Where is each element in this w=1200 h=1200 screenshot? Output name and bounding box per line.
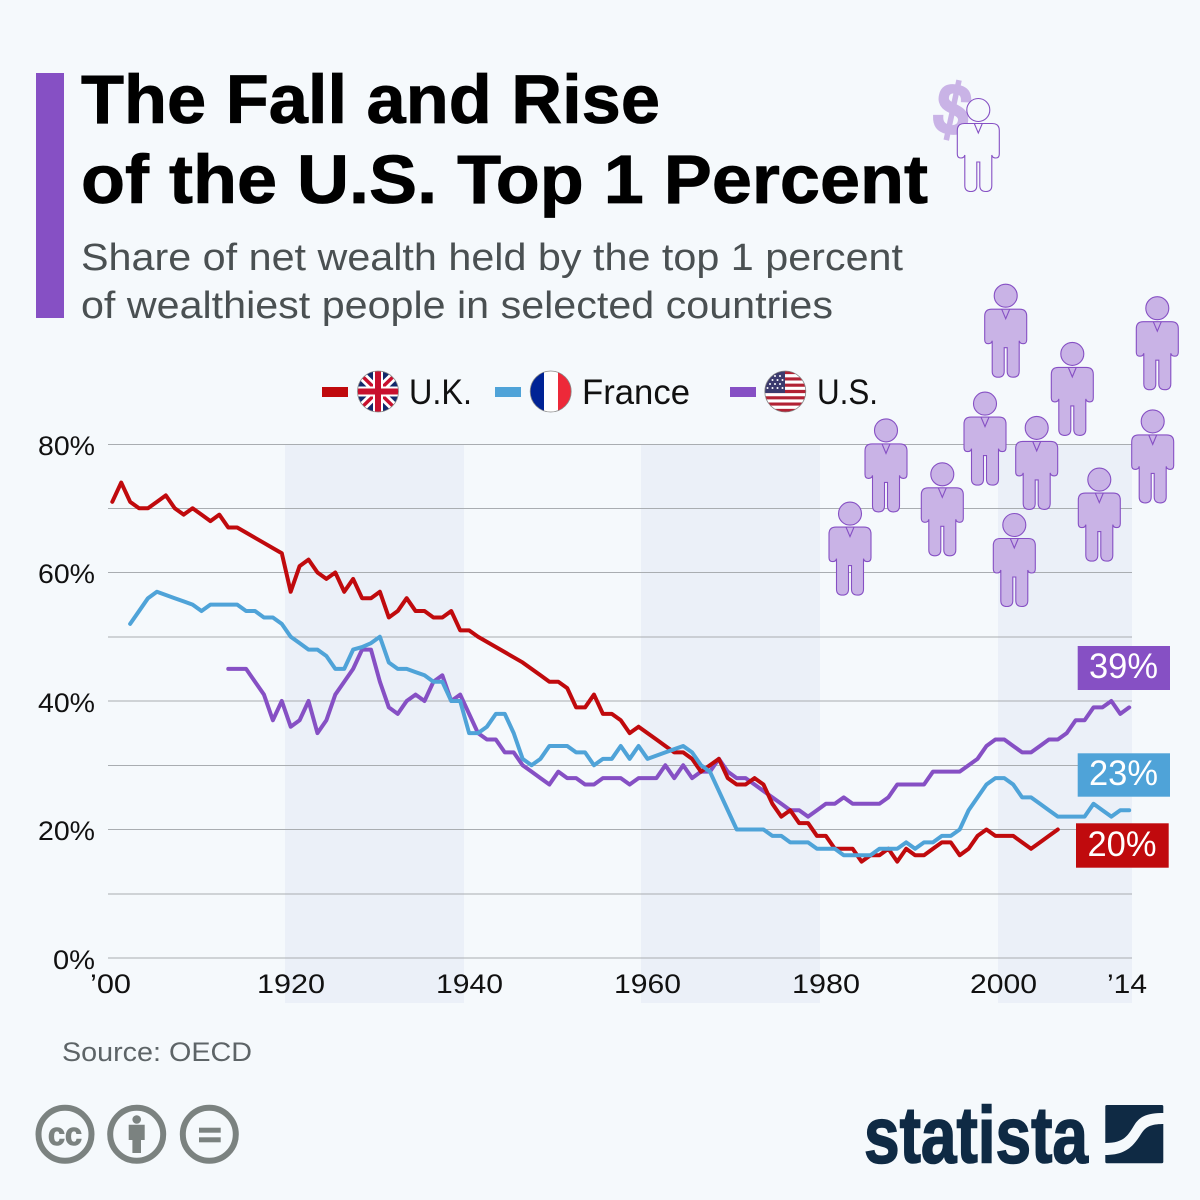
- y axis labels: 40%: [38, 688, 95, 718]
- legend: [322, 371, 878, 412]
- subtitle: of wealthiest people in selected countries: [81, 285, 833, 327]
- icon: U.K. flag: [357, 371, 399, 412]
- gridlines: [108, 444, 1132, 958]
- line chart: [112, 483, 1129, 862]
- person 11: [829, 502, 871, 595]
- y axis labels: 20%: [38, 816, 95, 846]
- icon: U.S. flag: [764, 371, 806, 412]
- statista logo mark: [1105, 1105, 1164, 1163]
- icon: dollar sign with person: $: [927, 67, 978, 153]
- subtitle: Share of net wealth held by the top 1 percent: [81, 237, 903, 279]
- person 10: [993, 514, 1035, 606]
- person 8: [921, 463, 963, 556]
- person 5: [1132, 410, 1174, 503]
- value label: France 23%: [1078, 753, 1170, 797]
- title: of the U.S. Top 1 Percent: [81, 141, 928, 218]
- x axis labels: 1980: [792, 969, 860, 999]
- statista wordmark: statista: [864, 1090, 1088, 1180]
- y axis labels: 80%: [38, 431, 95, 461]
- value label: France 23%: 23%: [1089, 754, 1158, 793]
- value label: U.S. 39%: [1078, 646, 1170, 690]
- legend swatch: U.S.: [730, 387, 756, 397]
- x axis labels: 1920: [257, 969, 325, 999]
- y axis labels: 0%: [53, 945, 95, 975]
- value label: U.K. 20%: 20%: [1088, 825, 1156, 864]
- y axis labels: [38, 431, 95, 975]
- person 1: [985, 284, 1027, 377]
- legend swatch: France: [495, 387, 521, 397]
- person 3: [1051, 342, 1093, 435]
- x axis labels: [90, 969, 1147, 999]
- person 7: [865, 419, 907, 512]
- legend label: France: France: [582, 373, 690, 412]
- icon: creative commons: [38, 1108, 92, 1161]
- x axis labels: ’14: [1107, 969, 1147, 999]
- icon: dollar sign with person: [927, 67, 999, 192]
- icon: no derivatives: [183, 1108, 236, 1161]
- decade shading bands: [285, 444, 1132, 1003]
- line: U.S.: [228, 650, 1129, 817]
- icon: creative commons: cc: [48, 1116, 82, 1152]
- people icons: [829, 284, 1178, 606]
- person 9: [1078, 468, 1120, 561]
- person 6: [1016, 416, 1058, 509]
- person 2: [1136, 297, 1178, 390]
- x axis labels: 1940: [436, 969, 503, 999]
- legend label: U.K.: U.K.: [409, 373, 472, 412]
- y axis labels: 60%: [38, 559, 95, 589]
- x axis labels: 1960: [614, 969, 681, 999]
- line: France: [130, 592, 1129, 855]
- accent bar: [36, 73, 64, 318]
- source: Source: OECD: [62, 1037, 252, 1067]
- icon: French flag: [530, 371, 572, 412]
- x axis labels: ’00: [90, 969, 131, 999]
- legend swatch: U.K.: [322, 387, 348, 397]
- value label: U.K. 20%: [1076, 823, 1169, 868]
- value label: U.S. 39%: 39%: [1089, 647, 1158, 686]
- person 4: [964, 392, 1006, 485]
- title: The Fall and Rise: [81, 61, 660, 138]
- icon: attribution: [110, 1108, 163, 1161]
- x axis labels: 2000: [970, 969, 1037, 999]
- legend label: U.S.: U.S.: [817, 373, 878, 412]
- line: U.K.: [112, 483, 1058, 862]
